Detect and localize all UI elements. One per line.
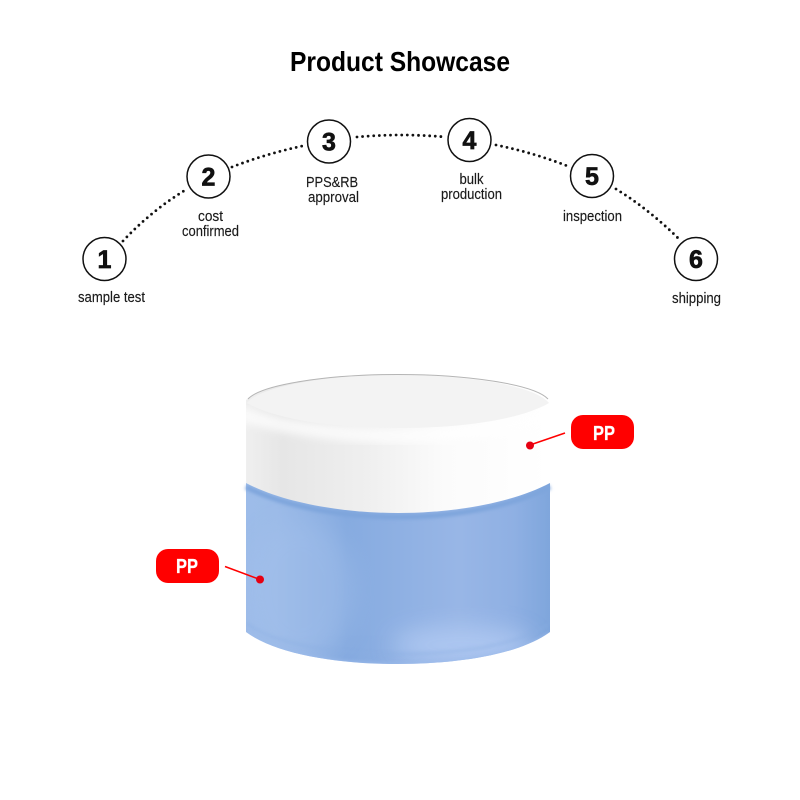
step 6: shipping <box>672 238 721 307</box>
label pill <box>571 415 634 449</box>
step 1: sample test: sample test <box>78 289 146 306</box>
dotted connector 5 to 6 <box>616 189 680 240</box>
pointer line <box>530 433 565 445</box>
step 1: sample test: 1 <box>98 246 112 274</box>
step 2: cost confirmed: confirmed <box>182 223 239 240</box>
step 3: PPS&RB approval <box>306 120 359 206</box>
step 1: sample test <box>78 238 146 306</box>
jar body <box>245 470 550 665</box>
step 3: PPS&RB approval: 3 <box>322 128 336 156</box>
dotted connector 2 to 3 <box>232 145 307 167</box>
step 4: bulk production: bulk <box>460 171 484 188</box>
step 6: shipping: 6 <box>689 246 703 274</box>
step 5: inspection: 5 <box>585 163 599 191</box>
dotted connector 3 to 4 <box>357 135 446 137</box>
callout: body material PP <box>156 549 264 584</box>
callout: lid material PP <box>526 415 634 450</box>
step 2: cost confirmed: 2 <box>202 164 215 192</box>
step 4: bulk production: production <box>441 186 502 203</box>
product: cosmetic jar <box>240 374 556 665</box>
pointer line <box>225 566 260 580</box>
dotted connector 1 to 2 <box>123 189 187 241</box>
step 4: bulk production <box>441 118 502 203</box>
callout: body material PP: PP <box>176 556 198 578</box>
step 2: cost confirmed: cost <box>198 208 224 225</box>
step 3: PPS&RB approval: PPS&RB <box>306 174 358 191</box>
step 5: inspection: inspection <box>563 208 622 225</box>
pointer dot <box>526 442 534 450</box>
callout: lid material PP: PP <box>593 423 615 445</box>
process timeline <box>78 118 721 307</box>
pointer dot <box>256 576 264 584</box>
jar lid <box>240 374 556 513</box>
step 5: inspection <box>563 154 622 225</box>
label pill <box>156 549 219 583</box>
title: Product Showcase <box>290 46 510 77</box>
step 6: shipping: shipping <box>672 290 721 307</box>
step 3: PPS&RB approval: approval <box>308 189 359 206</box>
step 4: bulk production: 4 <box>463 127 477 155</box>
dotted connector 4 to 5 <box>496 145 570 167</box>
step 2: cost confirmed <box>182 155 239 240</box>
